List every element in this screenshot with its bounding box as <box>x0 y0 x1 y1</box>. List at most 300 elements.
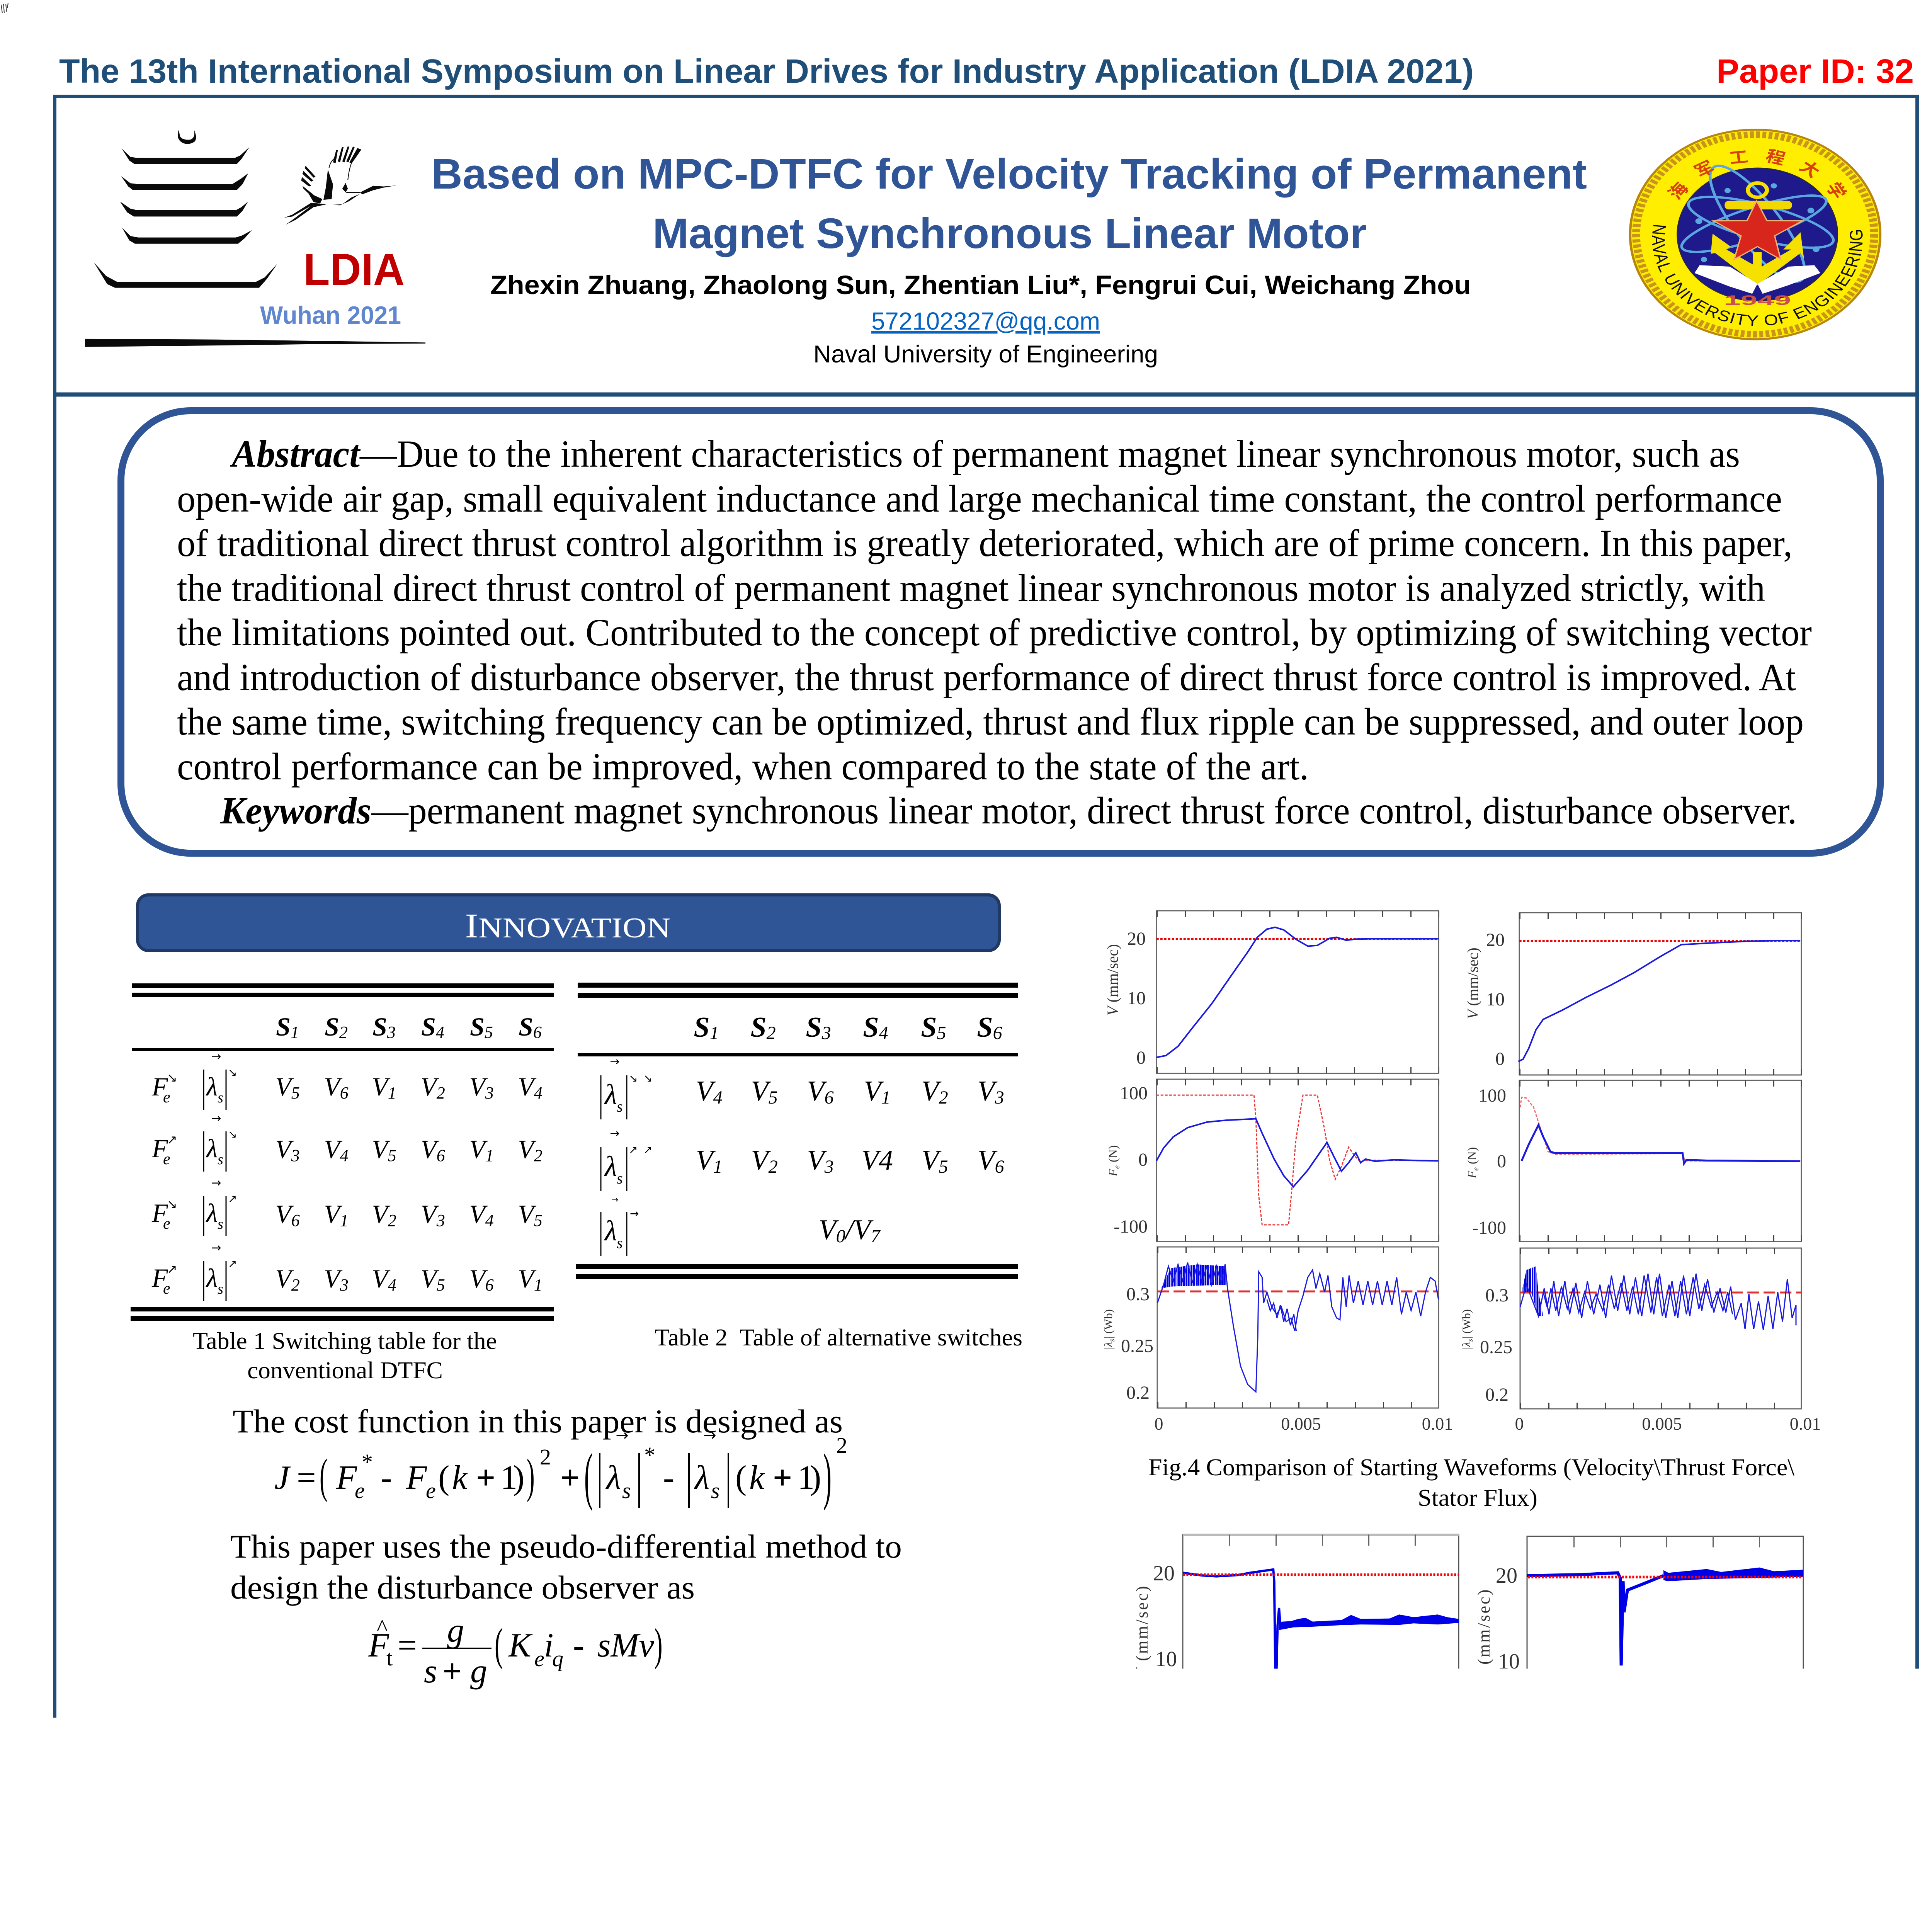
chart: fig 4 starting waveforms: 0.3 <box>1126 1284 1150 1304</box>
table 1 row 4: ↗ <box>228 1257 237 1270</box>
table 1 row 1: V <box>324 1072 340 1101</box>
table 1 row 2: V <box>275 1134 291 1164</box>
table 1 row 1: ↘ <box>167 1070 177 1085</box>
table 1 row 3: F <box>151 1198 168 1228</box>
equation: disturbance observer <box>368 1612 767 1785</box>
table 1 row 2 <box>151 1112 543 1172</box>
caption: fig 5: Fig.5 Velocity Waveforms With External Force <box>1238 1813 1703 1839</box>
table 1 row 4: e <box>163 1280 170 1298</box>
table 1 row 3: → <box>211 1176 221 1190</box>
table 2 header: 5 <box>937 1023 946 1043</box>
table 1 row 1: V <box>469 1072 485 1101</box>
equation: disturbance observer: ) <box>654 1619 663 1670</box>
chart: fig 1 thrust force: (N) <box>114 1884 128 1908</box>
equation: cost function: s <box>622 1478 631 1503</box>
table 2: alternative switches <box>576 983 1022 1351</box>
table 1 row 1: 6 <box>340 1083 349 1102</box>
text: observer intro: This paper uses the pseudo-differential method to <box>230 1528 902 1565</box>
table 1 header: 6 <box>533 1023 542 1042</box>
fig 5 tick labels: 0.05 <box>1443 1775 1477 1796</box>
chart: fig 4 starting waveforms: 100 <box>1120 1083 1148 1104</box>
table 1 row 3: 3 <box>436 1211 445 1230</box>
chart: fig 4 starting waveforms: 10 <box>1486 989 1505 1010</box>
fig 4 axis labels <box>1102 944 1481 1349</box>
table 2 row 3: /V <box>844 1214 874 1246</box>
equation: cost function: - <box>381 1459 392 1497</box>
chart: fig 2 thrust force: 20 <box>599 1878 612 1893</box>
table 1 row 1 <box>151 1050 543 1110</box>
icon: LDIA logo <box>85 130 425 347</box>
equation: disturbance observer: + <box>447 1748 466 1785</box>
table 2 row 1: V <box>921 1075 939 1107</box>
chart: fig 4 starting waveforms <box>1102 911 1821 1434</box>
table 1 row 3 <box>151 1176 543 1236</box>
fig 5 tick labels <box>1163 1774 1820 1796</box>
fig 4 tick labels: 0 <box>1515 1414 1524 1434</box>
equation: cost function: → <box>616 1427 629 1444</box>
table 1 row 4: 1 <box>534 1276 543 1294</box>
table 1 row 3: 5 <box>534 1211 543 1230</box>
chart: fig 5 velocity waveforms: 0 <box>1166 1732 1177 1756</box>
chart: fig 2 thrust force: (N) <box>579 1879 593 1903</box>
table 1 header: 1 <box>291 1023 299 1042</box>
paper id: Paper ID: 32 <box>1716 53 1914 90</box>
table 1 header: 4 <box>436 1023 444 1042</box>
fig 5 tick labels: 0.04 <box>1694 1774 1728 1795</box>
abstract text: the same time, switching frequency can be optimized, thrust and flux ripple can be suppressed, and outer loop <box>177 700 1804 743</box>
table 2 row 2 <box>601 1127 1004 1191</box>
table 1 row 1: s <box>218 1090 223 1106</box>
table 1 row 4: 2 <box>291 1276 300 1294</box>
fig 4 axis labels: s <box>1466 1339 1475 1342</box>
table 1 rules <box>131 983 554 1321</box>
table 1 row 3: 4 <box>485 1211 494 1230</box>
table 2 row 3: → <box>630 1207 639 1220</box>
chart: fig 2 thrust force: e <box>585 1902 595 1906</box>
chart: fig 5 velocity waveforms: 20 <box>1153 1561 1175 1585</box>
table 1 row 3: V <box>469 1199 485 1229</box>
table 1 row 2: 5 <box>388 1146 396 1165</box>
table 1 row 1: ↘ <box>228 1066 237 1079</box>
equation: disturbance observer: e <box>537 1741 547 1766</box>
table 1 row 4: 4 <box>388 1276 396 1294</box>
equation: disturbance observer: g <box>447 1612 464 1650</box>
equation: cost function: e <box>426 1478 436 1503</box>
chart: fig 2 thrust force <box>579 1866 976 1932</box>
equation: disturbance observer: q <box>552 1646 563 1671</box>
table 2 row 2: V <box>696 1145 713 1176</box>
table 2 row 1: ↘ <box>629 1072 638 1085</box>
corner mark <box>1 3 8 13</box>
table 1 row 3: V <box>420 1199 437 1229</box>
table 2 header: S <box>977 1012 993 1043</box>
chart: fig 4 starting waveforms: 0.2 <box>1126 1383 1150 1403</box>
chart: fig 4 starting waveforms: 0 <box>1138 1150 1148 1170</box>
table 2 row 3: λ <box>604 1215 617 1247</box>
fig 4 tick labels: 0.01 <box>1422 1414 1453 1434</box>
table 2 header: S <box>806 1012 822 1043</box>
table 1 row 2: V <box>469 1134 485 1164</box>
equation: cost function: F <box>336 1459 357 1497</box>
equation: cost function: J <box>274 1459 291 1497</box>
equation: cost function: ) <box>823 1441 832 1512</box>
table 1 row 2: 4 <box>340 1146 349 1165</box>
heading: conclusion <box>1037 1862 1905 1922</box>
abstract text: Keywords <box>220 789 371 832</box>
equation: disturbance observer: gMv <box>601 1723 662 1761</box>
table 1 row 3: V <box>372 1199 388 1229</box>
table 2 row 2: V <box>921 1145 939 1176</box>
email: 572102327@qq.com <box>871 307 1100 335</box>
table 2 row 1: λ <box>604 1079 617 1111</box>
fig 4 axis labels: (N) <box>1106 1145 1120 1165</box>
table 1 row 2: F <box>151 1134 168 1163</box>
abstract text: the traditional direct thrust control of permanent magnet linear synchronous motor is analyzed strictly, with <box>177 566 1765 609</box>
equation: cost function: ( <box>438 1459 449 1497</box>
equation: cost function: + <box>476 1459 495 1497</box>
table 1 row 2: 6 <box>437 1146 445 1165</box>
table 2 row 2: 6 <box>995 1156 1004 1177</box>
table 1 row 1: 4 <box>534 1083 543 1102</box>
fig 5 tick labels: 0.04 <box>1350 1775 1384 1796</box>
fig 4 tick labels: 0.005 <box>1642 1414 1682 1434</box>
table 1 row 2: λ <box>206 1134 218 1163</box>
table 1 header: S <box>325 1012 339 1041</box>
abstract text <box>177 432 1812 832</box>
table 2 row 2: λ <box>604 1151 617 1182</box>
affiliation: Naval University of Engineering <box>813 341 1158 368</box>
table 1 row 3: s <box>218 1216 223 1232</box>
equation: disturbance observer: g <box>474 1748 491 1785</box>
equation: cost function: 2 <box>540 1444 551 1469</box>
conference title: The 13th International Symposium on Linear Drives for Industry Application (LDIA 2021) <box>59 53 1474 90</box>
table 2 row 2: s <box>617 1170 623 1187</box>
heading: conclusion: CONCLUSION <box>1361 1875 1580 1915</box>
abstract text: and introduction of disturbance observer, the thrust performance of direct thrust force control is improved. At <box>177 656 1796 699</box>
equation: disturbance observer: K <box>513 1723 538 1761</box>
table 1 header: S <box>421 1012 436 1041</box>
table 1 row 4: 6 <box>485 1276 494 1294</box>
table 1 row 2: V <box>372 1134 388 1164</box>
chart: fig 4 starting waveforms: -100 <box>1114 1216 1148 1237</box>
chart: fig 4 starting waveforms: 0 <box>1136 1048 1146 1068</box>
equation: cost function <box>274 1427 847 1512</box>
fig 5 curves <box>1183 1568 1803 1706</box>
equation: disturbance observer: e <box>534 1646 544 1671</box>
heading: innovation <box>138 895 999 951</box>
abstract text: —permanent magnet synchronous linear motor, direct thrust force control, disturbance observer. <box>371 789 1797 832</box>
abstract text: control performance can be improved, when compared to the state of the art. <box>177 745 1309 788</box>
table 1 caption: conventional DTFC <box>247 1357 443 1384</box>
icon: university emblem <box>1630 130 1880 339</box>
table 1 caption: Table 1 Switching table for the <box>193 1328 497 1354</box>
table 2 row 3: V <box>819 1214 836 1246</box>
equation: cost function: k <box>749 1459 765 1497</box>
table 1 header: 5 <box>485 1023 493 1042</box>
text: cost function intro: The cost function in this paper is designed as <box>233 1403 843 1440</box>
equation: cost function: ) <box>513 1459 524 1497</box>
chart: fig 1 thrust force <box>114 1872 513 1932</box>
chart: fig 4 starting waveforms: 0.25 <box>1121 1336 1153 1356</box>
table 1 row 4: V <box>469 1264 485 1293</box>
fig 4 curves <box>1156 927 1801 1392</box>
chart: fig 4 starting waveforms: 0.3 <box>1485 1285 1509 1306</box>
chart: fig 4 starting waveforms: 0.2 <box>1485 1384 1509 1405</box>
fig 4 axis labels: s <box>1108 1339 1116 1342</box>
table 2 header: 1 <box>710 1023 719 1043</box>
table 1 header: S <box>519 1012 533 1041</box>
table 2 row 1: 1 <box>881 1087 891 1108</box>
caption: fig 4: Fig.4 Comparison of Starting Waveforms (Velocity\Thrust Force\ <box>1148 1454 1795 1481</box>
table 1 row 2: ↘ <box>228 1128 237 1141</box>
table 1 row 3: λ <box>206 1198 218 1228</box>
table 1 row 1: → <box>211 1050 221 1063</box>
icon: university emblem: 海军工程大学 <box>1661 143 1862 214</box>
table 1 row 3: ↘ <box>167 1197 177 1211</box>
heading: simulation: SIMULATION <box>447 1804 653 1844</box>
table 1 row 4 <box>151 1241 543 1301</box>
table 2 row 1: → <box>610 1055 620 1068</box>
equation: cost function: + <box>560 1459 580 1497</box>
equation: cost function: 1 <box>798 1459 815 1497</box>
table 1 row 1: e <box>163 1088 170 1106</box>
equation: disturbance observer: s <box>427 1748 440 1785</box>
table 2 header: 2 <box>767 1023 776 1043</box>
equation: disturbance observer: ) <box>661 1716 669 1766</box>
icon: university emblem: 1949 <box>1724 293 1791 308</box>
fig 4 axis labels: (N) <box>1465 1147 1479 1167</box>
equation: disturbance observer: i <box>544 1627 553 1664</box>
table 2 row 1: V <box>977 1075 995 1107</box>
text: observer intro <box>230 1528 902 1606</box>
chart: fig 4 starting waveforms: -100 <box>1472 1218 1506 1238</box>
icon: pagoda <box>85 130 425 347</box>
title: Based on MPC-DTFC for Velocity Tracking of Permanent <box>431 150 1587 198</box>
table 1 row 3: V <box>275 1199 291 1229</box>
table 1 row 3: 2 <box>388 1211 396 1230</box>
fig 4 axis labels: | (Wb) <box>1102 1309 1115 1339</box>
equation: cost function: - <box>663 1459 674 1497</box>
table 2 row 2: → <box>610 1127 620 1140</box>
logo text: LDIA: LDIA <box>303 244 405 294</box>
fig 4 axis labels: F <box>1106 1168 1120 1177</box>
equation: disturbance observer: g <box>470 1653 487 1690</box>
table 2 row 2: 1 <box>713 1156 723 1177</box>
table 2 row 2: ↗ <box>643 1143 652 1156</box>
table 1 row 2: ↗ <box>167 1132 177 1147</box>
table 2 rules <box>576 983 1018 1279</box>
equation: disturbance observer: g <box>449 1708 466 1746</box>
equation: disturbance observer: gMv <box>706 1723 767 1761</box>
equation: cost function: * <box>644 1442 655 1468</box>
abstract text: open-wide air gap, small equivalent inductance and large mechanical time constant, the control performance <box>177 477 1782 520</box>
chart: fig 1 thrust force: e <box>120 1907 130 1911</box>
table 1 row 4: V <box>420 1264 437 1293</box>
chart: fig 5 velocity waveforms: 10 <box>1498 1650 1520 1673</box>
chart: fig 5 velocity waveforms: 10 <box>1155 1647 1177 1671</box>
table 2 header: 6 <box>993 1023 1002 1043</box>
equation: disturbance observer: = <box>398 1627 417 1664</box>
logo text: Wuhan 2021: Wuhan 2021 <box>260 301 401 329</box>
chart: fig 1 thrust force: F <box>114 1911 128 1919</box>
table 1 row 4: λ <box>206 1263 218 1293</box>
equation: cost function: + <box>773 1459 792 1497</box>
table 1 caption <box>193 1328 497 1384</box>
equation: disturbance observer: + <box>575 1723 594 1761</box>
table 2 row 1: 3 <box>995 1087 1004 1108</box>
abstract box <box>121 411 1880 853</box>
table 1 row 2: s <box>218 1151 223 1168</box>
fig 5 axis labels: V (mm/sec) <box>1475 1588 1493 1683</box>
table 1 row 1: F <box>151 1072 168 1101</box>
table 1 row 4: 5 <box>437 1276 445 1294</box>
equation: cost function: = <box>297 1459 316 1497</box>
title line 2: Magnet Synchronous Linear Motor <box>653 210 1367 257</box>
table 2 row 1: V <box>751 1075 769 1107</box>
table 1 row 2: V <box>518 1134 534 1164</box>
table 2 row 3 <box>601 1195 881 1256</box>
equation: disturbance observer: = <box>400 1723 420 1761</box>
fig 5 tick labels: 0.03 <box>1600 1774 1634 1795</box>
table 2 row 2: ↗ <box>629 1143 638 1156</box>
table 1 header: 3 <box>387 1023 396 1042</box>
fig 4 axis labels: | (Wb) <box>1460 1309 1473 1339</box>
fig 4 tick labels <box>1155 1414 1821 1434</box>
table 1 row 1: 1 <box>388 1083 396 1102</box>
chart: fig 2 thrust force: F <box>579 1906 593 1914</box>
table 1 row 2: V <box>420 1134 437 1164</box>
table 1 row 1: V <box>372 1072 388 1101</box>
equation: disturbance observer: ^ <box>377 1615 388 1640</box>
abstract text: of traditional direct thrust control algorithm is greatly deteriorated, which are of prime concern. In this paper, <box>177 522 1793 565</box>
table 1 row 3: 6 <box>291 1211 300 1230</box>
chart: fig 4 starting waveforms: 20 <box>1127 929 1146 949</box>
chart: fig 4 starting waveforms: 20 <box>1486 930 1505 950</box>
table 1 row 4: 3 <box>340 1276 349 1294</box>
table 2 row 3: 0 <box>836 1226 845 1247</box>
table 1 row 2: 1 <box>485 1146 494 1165</box>
heading: innovation: INNOVATION <box>465 907 671 945</box>
table 2 row 2: 3 <box>824 1156 834 1177</box>
table 2 row 1: ↘ <box>643 1072 652 1085</box>
table 1 row 1: λ <box>206 1072 218 1101</box>
equation: cost function: ( <box>320 1450 328 1503</box>
table 2 row 1: 2 <box>939 1087 948 1108</box>
table 2 row 1: V <box>807 1075 825 1107</box>
equation: disturbance observer: - <box>573 1627 584 1664</box>
chart: fig 1 conventional DTFC response <box>106 1872 513 1932</box>
icon: crane <box>284 146 396 224</box>
authors: Zhexin Zhuang, Zhaolong Sun, Zhentian Liu*, Fengrui Cui, Weichang Zhou <box>490 270 1471 300</box>
table 1 header: 2 <box>339 1023 348 1042</box>
equation: disturbance observer: i <box>548 1723 557 1761</box>
chart: fig 2 proposed MP-DTFC response <box>572 1866 976 1932</box>
table 1 header: S <box>372 1012 387 1041</box>
panel: abstract <box>121 411 1880 853</box>
chart: fig 1 thrust force: 20 <box>139 1886 152 1901</box>
fig 5 tick labels: 0.02 <box>1163 1775 1197 1796</box>
table 2 row 3: → <box>611 1195 618 1205</box>
table 2 row 1: V <box>696 1075 713 1107</box>
table 1 row 1: 3 <box>485 1083 494 1102</box>
table 2 header: 3 <box>821 1023 831 1043</box>
table 2 header: S <box>921 1012 937 1043</box>
table 1 row 3: ↗ <box>228 1192 237 1205</box>
table 1 row 4: V <box>518 1264 534 1293</box>
fig 5 ticks <box>1229 1540 1803 1764</box>
table 2 header <box>694 1012 1002 1043</box>
table 2 header: S <box>750 1012 767 1043</box>
fig 4 axis labels: F <box>1465 1170 1479 1179</box>
table 1 row 1: V <box>420 1072 437 1101</box>
fig 4 axis labels: V (mm/sec) <box>1104 944 1121 1016</box>
table 2 row 1: s <box>617 1098 623 1115</box>
fig 5 axis labels <box>1133 1585 1493 1683</box>
equation: cost function: λ <box>605 1459 621 1497</box>
table 2 row 2: V <box>977 1145 995 1176</box>
chart: fig 5 velocity waveforms: 20 <box>1496 1564 1517 1588</box>
table 1 row 4: ↗ <box>167 1262 177 1276</box>
equation: disturbance observer: sMv <box>597 1627 655 1664</box>
table 1 header: S <box>470 1012 485 1041</box>
chart: fig 4 starting waveforms: 0.25 <box>1480 1337 1512 1357</box>
chart: fig 4 starting waveforms: 0 <box>1497 1151 1506 1172</box>
fig 5 frames <box>1183 1535 1803 1769</box>
table 1 row 4: s <box>218 1281 223 1297</box>
fig 4 axis labels: |λ <box>1460 1342 1473 1349</box>
equation: disturbance observer: + <box>442 1653 462 1690</box>
icon: university emblem: NAVAL UNIVERSITY OF ENGINEERING <box>1648 223 1867 330</box>
chart: fig 5 velocity waveforms: 0 <box>1509 1735 1520 1759</box>
equation: cost function: ) <box>810 1459 821 1497</box>
table 2 row 2: V4 <box>861 1145 893 1176</box>
table 1 row 3: 1 <box>340 1211 349 1230</box>
table 1 row 3: V <box>324 1199 340 1229</box>
equation: cost function: e <box>355 1478 365 1503</box>
table 1 header: S <box>276 1012 291 1041</box>
equation: cost function: F <box>406 1459 427 1497</box>
table 1 row 1: V <box>518 1072 534 1101</box>
fig 5 tick labels: 0.02 <box>1507 1774 1541 1795</box>
equation: cost function: λ <box>694 1459 709 1497</box>
table 2 row 3: s <box>617 1234 623 1252</box>
table 1 row 4: V <box>372 1264 388 1293</box>
equation: disturbance observer: t <box>386 1645 393 1670</box>
equation: disturbance observer: K <box>508 1627 533 1664</box>
fig 4 ticks <box>1156 914 1802 1406</box>
chart: fig 4 starting waveforms: 0 <box>1495 1049 1505 1069</box>
equation: cost function: → <box>703 1427 716 1444</box>
caption: fig 4 <box>1148 1454 1795 1511</box>
equation: disturbance observer: ( <box>498 1716 507 1766</box>
equation: cost function: 1 <box>500 1459 517 1497</box>
table 1 row 2: 3 <box>291 1146 300 1165</box>
table 1 row 3: V <box>518 1199 534 1229</box>
table 1 row 2: V <box>324 1134 340 1164</box>
fig 4 tick labels: 0.005 <box>1281 1414 1321 1434</box>
fig 4 axis labels: V (mm/sec) <box>1464 947 1481 1019</box>
fig 4 axis labels: e <box>1113 1165 1121 1169</box>
table 1 row 2: → <box>211 1112 221 1125</box>
equation: cost function: ( <box>735 1459 747 1497</box>
equation: disturbance observer: F <box>368 1627 389 1664</box>
conference header <box>59 53 1914 90</box>
equation: cost function: s <box>711 1478 720 1503</box>
chart: fig 4 starting waveforms: 10 <box>1127 988 1146 1009</box>
heading: simulation <box>117 1792 984 1851</box>
table 2 row 2: 5 <box>939 1156 948 1177</box>
poster title block <box>431 150 1587 368</box>
